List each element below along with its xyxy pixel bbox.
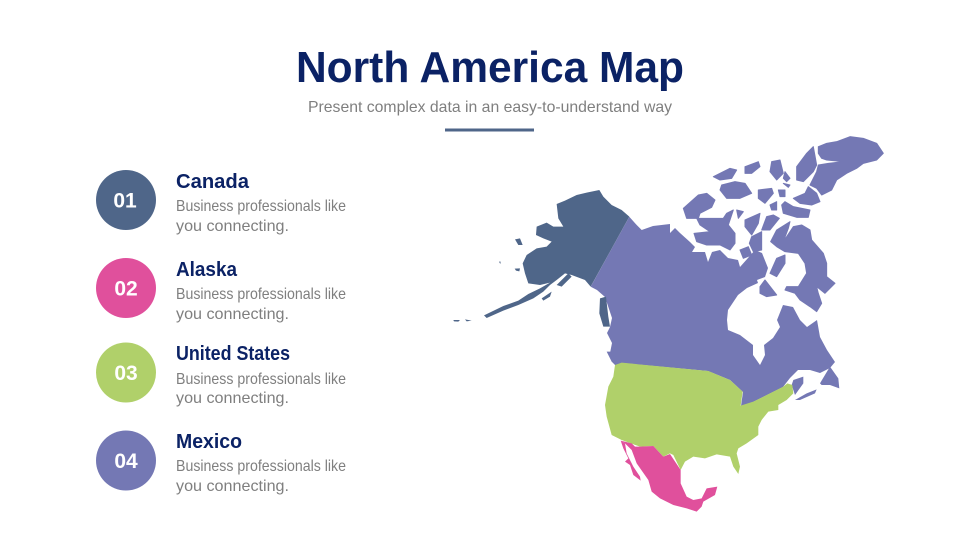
- list item 03: United States: [96, 342, 346, 407]
- badge 04: 04: [114, 450, 138, 473]
- description Mexico: [176, 458, 346, 495]
- description Canada: [176, 198, 346, 235]
- badge 02: 02: [114, 278, 138, 300]
- heading Mexico: Mexico: [176, 431, 242, 453]
- description United States: [176, 371, 346, 407]
- badge 04: [96, 430, 156, 490]
- description Alaska: Business professionals like: [176, 286, 346, 303]
- title underline: [445, 128, 534, 132]
- heading Canada: Canada: [176, 171, 250, 193]
- map of North America: [453, 137, 883, 512]
- description Alaska: you connecting.: [176, 306, 289, 323]
- title: North America Map: [296, 43, 684, 92]
- map region: United States: [605, 363, 793, 474]
- badge 01: 01: [113, 190, 137, 212]
- badge 02: [96, 258, 156, 318]
- description Mexico: you connecting.: [176, 478, 289, 495]
- heading United States: United States: [176, 343, 290, 365]
- map region: Mexico: [621, 441, 717, 512]
- description Mexico: Business professionals like: [176, 458, 346, 475]
- badge 03: 03: [114, 362, 138, 385]
- description Canada: Business professionals like: [176, 198, 346, 215]
- badge 03: [96, 342, 156, 402]
- map region: Alaska: [453, 190, 629, 327]
- description Canada: you connecting.: [176, 218, 289, 235]
- list item 04: Mexico: [96, 430, 346, 495]
- heading Alaska: Alaska: [176, 259, 238, 281]
- description United States: Business professionals like: [176, 371, 346, 388]
- list item 01: Canada: [96, 170, 346, 235]
- map region: Canada: [591, 137, 883, 406]
- badge 01: [96, 170, 156, 230]
- subtitle: Present complex data in an easy-to-understand way: [308, 99, 672, 116]
- description United States: you connecting.: [176, 390, 289, 407]
- list item 02: Alaska: [96, 258, 346, 323]
- description Alaska: [176, 286, 346, 323]
